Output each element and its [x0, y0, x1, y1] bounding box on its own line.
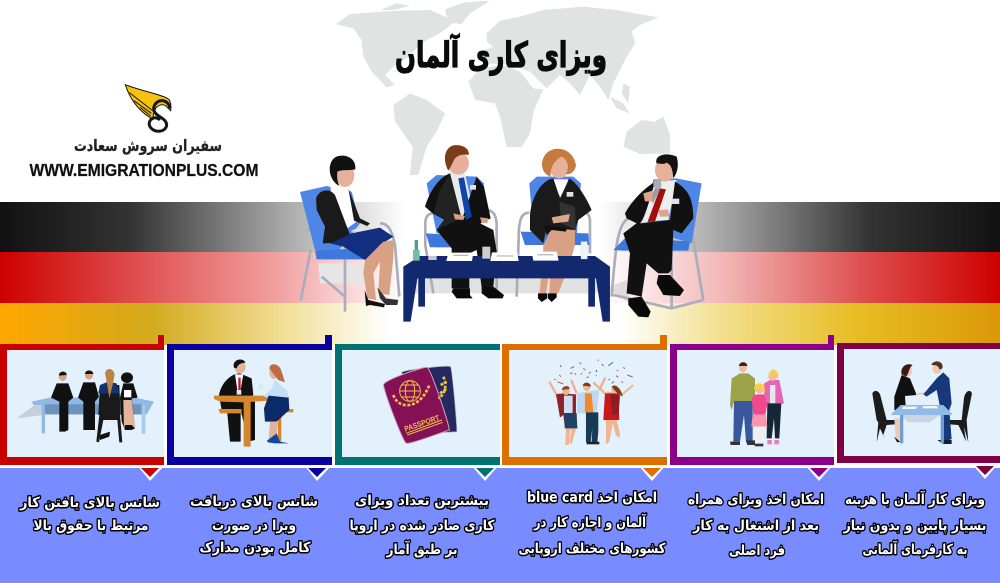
- card frame: [335, 344, 500, 465]
- caption 4: امکان اخذ blue card: [527, 490, 657, 506]
- person: man with blue tie: [425, 145, 504, 298]
- panel 6: handshake agreement: [837, 343, 1000, 479]
- card frame: [670, 335, 834, 465]
- icon: family of three: [730, 362, 784, 446]
- caption 2: کامل بودن مدارک: [200, 540, 311, 556]
- caption 5: امکان اخذ ویزای همراه: [688, 492, 824, 508]
- icon: couple talking at a table: [214, 359, 293, 447]
- card frame: [0, 335, 164, 465]
- card frame: [502, 335, 667, 465]
- panel 5: family: [670, 335, 834, 481]
- pointer: [805, 465, 833, 481]
- icon: interview panel at a table: [17, 369, 154, 442]
- caption 1: شانس بالای یافتن کار: [19, 495, 160, 511]
- card frame: [167, 335, 332, 465]
- floor shadow: [410, 278, 630, 303]
- caption 5: فرد اصلی: [729, 543, 785, 559]
- icon: two passports: [383, 366, 457, 443]
- card frame: [837, 343, 1000, 463]
- caption 6: بسیار پایین و بدون نیاز: [843, 518, 986, 534]
- world map: [336, 1, 670, 175]
- pointer: [304, 465, 332, 481]
- website url: WWW.EMIGRATIONPLUS.COM: [30, 160, 258, 180]
- person: woman taking notes: [300, 156, 399, 312]
- panel 4: celebrating friends: [502, 335, 667, 481]
- icon: three people cheering with confetti: [549, 360, 633, 445]
- caption 1: مرتبط با حقوق بالا: [34, 518, 148, 534]
- german flag bands: [0, 202, 1000, 345]
- company name: سفیران سروش سعادت: [74, 137, 222, 155]
- panel illustration: panel discussion scene: [300, 145, 703, 322]
- panel 2: visa meeting: [167, 335, 332, 481]
- icon: two passports: PASSPORT: [403, 413, 441, 434]
- title: ویزای کاری آلمان: [395, 33, 607, 76]
- panel 3: passports: [335, 344, 500, 481]
- caption 3: کاری صادر شده در اروپا: [350, 518, 495, 534]
- person: man speaking with microphone: [612, 154, 703, 317]
- pointer: [137, 465, 165, 481]
- person: woman with red hair: [517, 149, 592, 302]
- caption 2: [190, 494, 318, 556]
- caption 5: [688, 492, 824, 559]
- pointer: [638, 465, 666, 481]
- caption 6: [843, 490, 986, 558]
- caption 4: آلمان و اجازه کار در: [533, 513, 647, 531]
- logo: [30, 85, 258, 180]
- pointer: [471, 465, 499, 481]
- caption 3: بر طبق آمار: [386, 540, 458, 558]
- caption 4: [518, 490, 666, 557]
- caption 6: به کارفرمای آلمانی: [862, 540, 968, 558]
- table with water bottles and name cards: [403, 240, 610, 322]
- bottom caption background: [0, 468, 1000, 583]
- panel 1: interview: [0, 335, 165, 481]
- icon: business handshake over a table: [872, 361, 972, 444]
- caption 2: ویزا در صورت: [212, 518, 296, 534]
- caption 2: شانس بالای دریافت: [190, 494, 318, 510]
- caption 4: کشورهای مختلف اروپایی: [518, 541, 666, 557]
- caption 5: بعد از اشتغال به کار: [692, 518, 819, 534]
- caption 3: [350, 493, 495, 558]
- caption 1: [19, 495, 160, 534]
- icon: winged bird logo: [125, 85, 171, 131]
- pointer: [971, 463, 999, 479]
- caption 3: بیشترین تعداد ویزای: [355, 493, 489, 509]
